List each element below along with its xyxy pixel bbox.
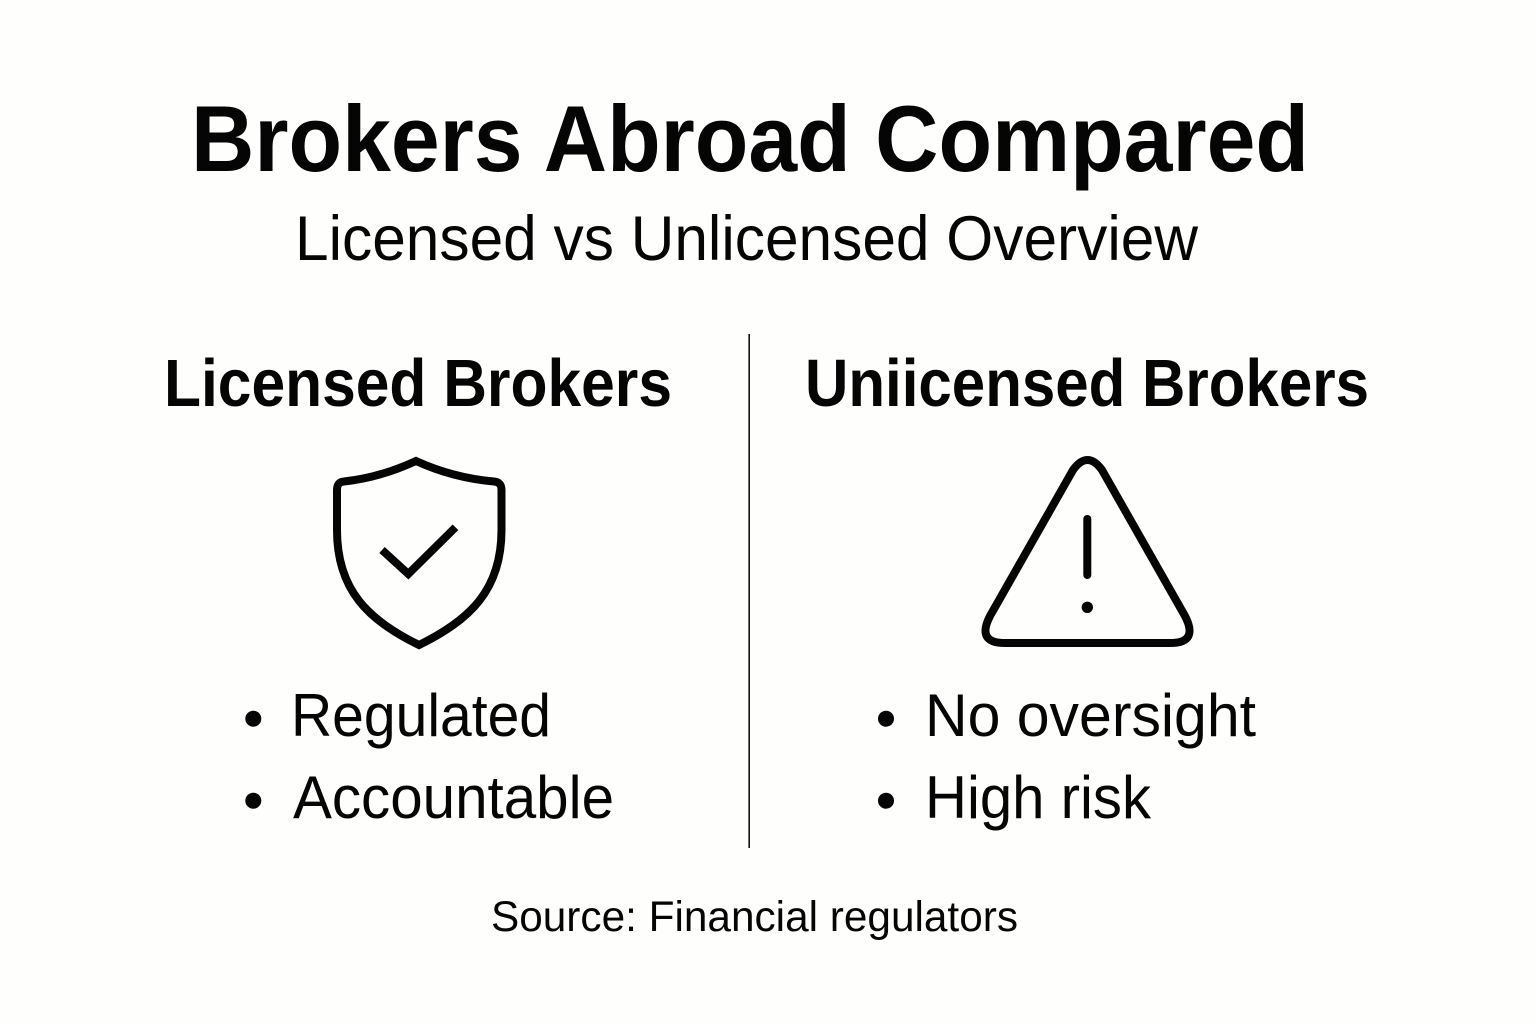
icon: warning triangle <box>985 460 1190 643</box>
source note: Source: Financial regulators <box>491 893 1018 941</box>
list: unlicensed points: High risk <box>925 764 1152 831</box>
list: unlicensed points: No oversight <box>925 682 1256 749</box>
heading: licensed brokers: Licensed Brokers <box>164 346 672 421</box>
list: unlicensed points <box>878 682 1256 831</box>
heading: unlicensed brokers: Uniicensed Brokers <box>805 346 1369 421</box>
subtitle: Licensed vs Unlicensed Overview <box>295 204 1198 274</box>
list: licensed points: Regulated <box>291 682 551 749</box>
list: licensed points: Accountable <box>293 764 614 831</box>
list: licensed points <box>245 682 614 831</box>
center divider <box>748 334 750 848</box>
icon: shield with check <box>337 461 502 645</box>
title: Brokers Abroad Compared <box>191 86 1309 191</box>
